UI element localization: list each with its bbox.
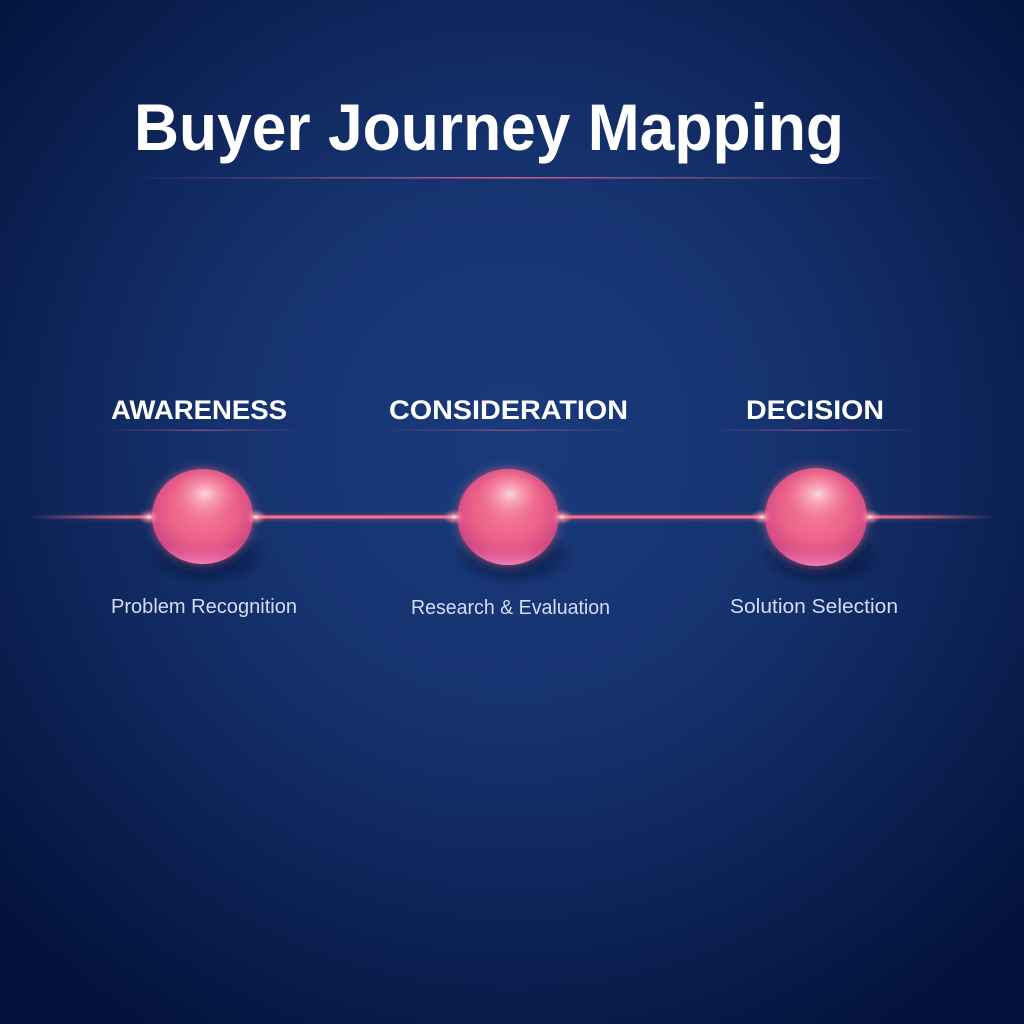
heading rule: decision	[708, 430, 923, 431]
stage description: decision: Solution Selection	[730, 596, 898, 618]
title: Buyer Journey Mapping	[134, 90, 844, 164]
heading rule: awareness	[100, 430, 305, 431]
stage: decision	[708, 395, 923, 618]
stage heading: awareness: AWARENESS	[111, 395, 287, 425]
node: decision sphere	[751, 458, 885, 587]
stage description: awareness: Problem Recognition	[111, 596, 297, 618]
node: consideration sphere	[443, 459, 576, 586]
stage: consideration	[375, 395, 640, 619]
timeline connector	[30, 514, 995, 520]
heading rule: consideration	[375, 430, 640, 431]
stage heading: decision: DECISION	[746, 395, 884, 425]
stage heading: consideration: CONSIDERATION	[389, 395, 628, 425]
stage description: consideration: Research & Evaluation	[411, 597, 610, 619]
stage: awareness	[100, 395, 305, 618]
title underline	[120, 177, 905, 179]
node: awareness sphere	[138, 460, 270, 586]
